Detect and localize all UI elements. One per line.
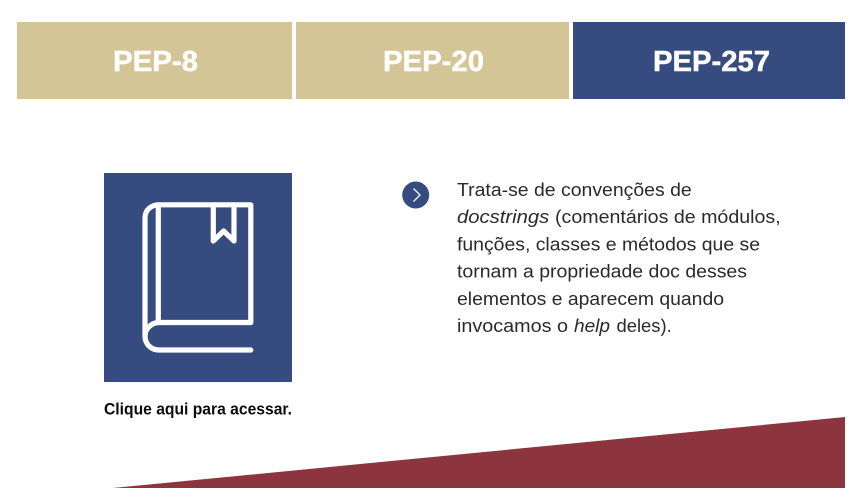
text block: description: docstrings: [457, 206, 549, 227]
text block: description: [457, 179, 781, 336]
text block: description: invocamos o: [457, 315, 568, 336]
text block: description: help: [574, 315, 610, 336]
caption: Clique aqui para acessar.: [104, 400, 292, 418]
icon: book on blue square: [104, 173, 292, 382]
tab: PEP-20: PEP-20: [383, 46, 484, 78]
tab: PEP-8: PEP-8: [113, 46, 198, 78]
text block: description: funções, classes e métodos que se: [457, 233, 760, 254]
text block: description: elementos e aparecem quando: [457, 288, 724, 309]
tab: PEP-20: [296, 22, 569, 99]
tab: PEP-257 (active): PEP-257: [653, 46, 770, 78]
tabs row: [17, 22, 845, 99]
text block: description: (comentários de módulos,: [555, 206, 781, 227]
tab: PEP-8: [17, 22, 292, 99]
panel: book link: [104, 173, 292, 418]
text block: description: tornam a propriedade doc desses: [457, 261, 747, 282]
tab: PEP-257 (active): [573, 22, 845, 99]
decorative red wedge: [113, 417, 845, 488]
icon: chevron bullet: [402, 182, 429, 208]
text block: description: deles).: [616, 315, 672, 336]
text block: description: Trata-se de convenções de: [457, 179, 692, 200]
